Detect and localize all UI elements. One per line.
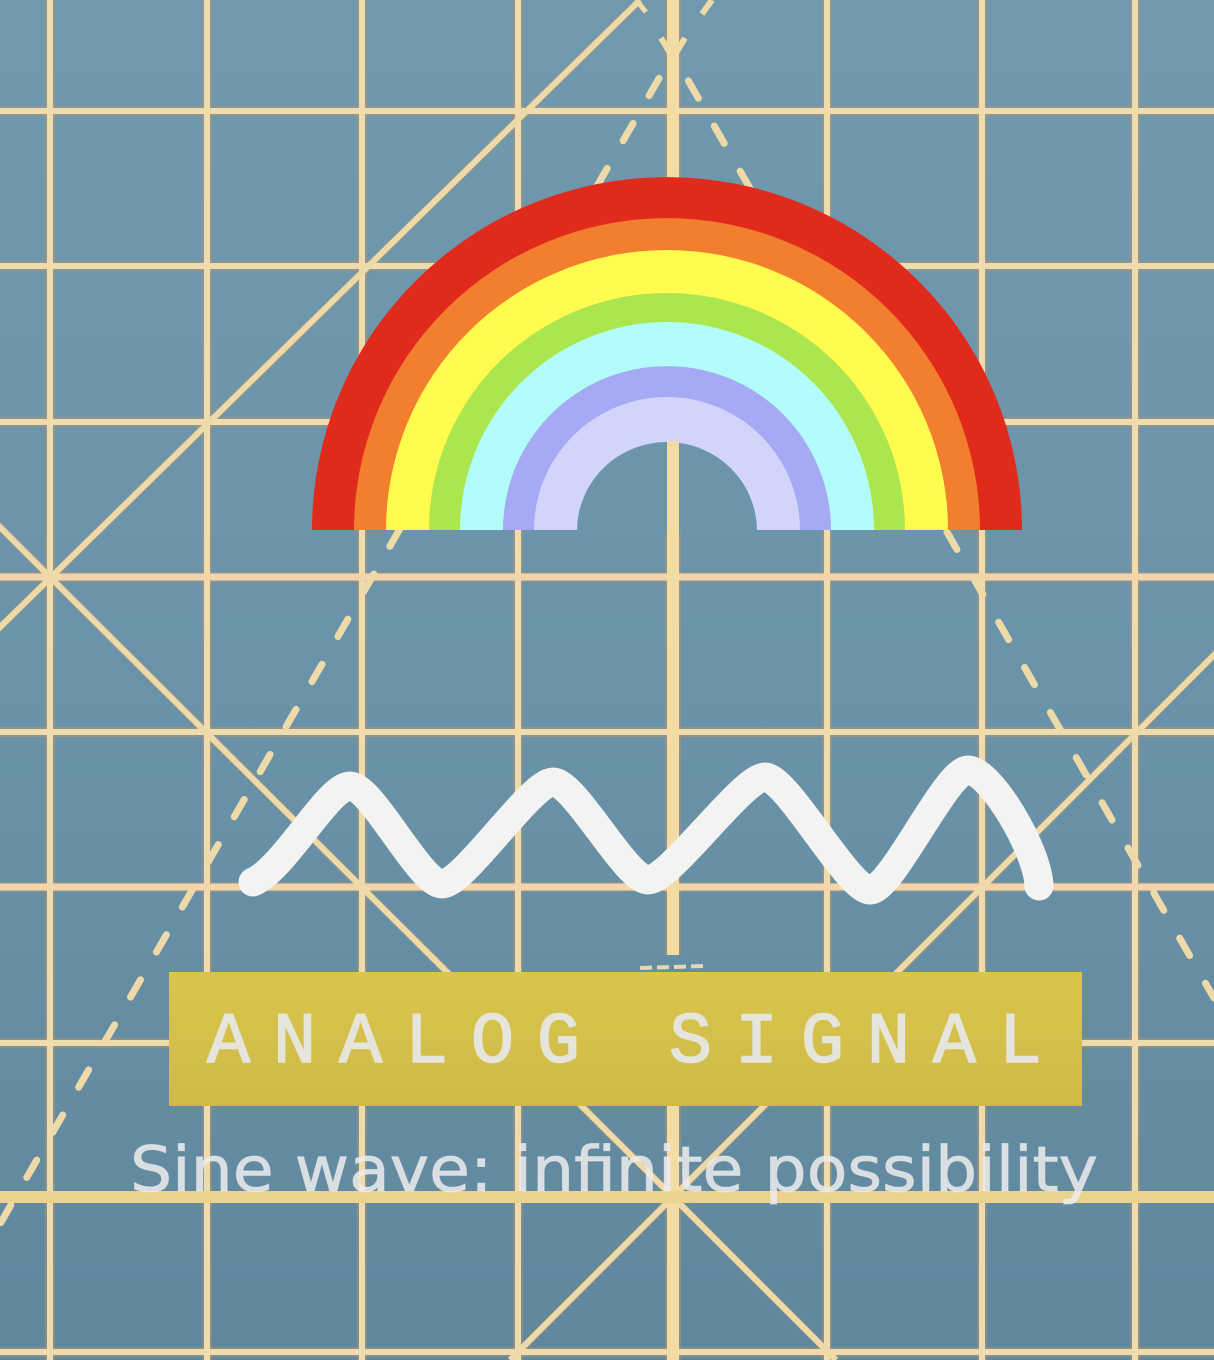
heading: ANALOG SIGNAL bbox=[207, 1002, 1042, 1084]
icon: analog sine wave bbox=[253, 770, 1039, 890]
caption: Sine wave: infinite possibility bbox=[130, 1133, 1098, 1206]
rainbow icon bbox=[312, 177, 1022, 531]
label box: analog signal bbox=[169, 972, 1082, 1106]
